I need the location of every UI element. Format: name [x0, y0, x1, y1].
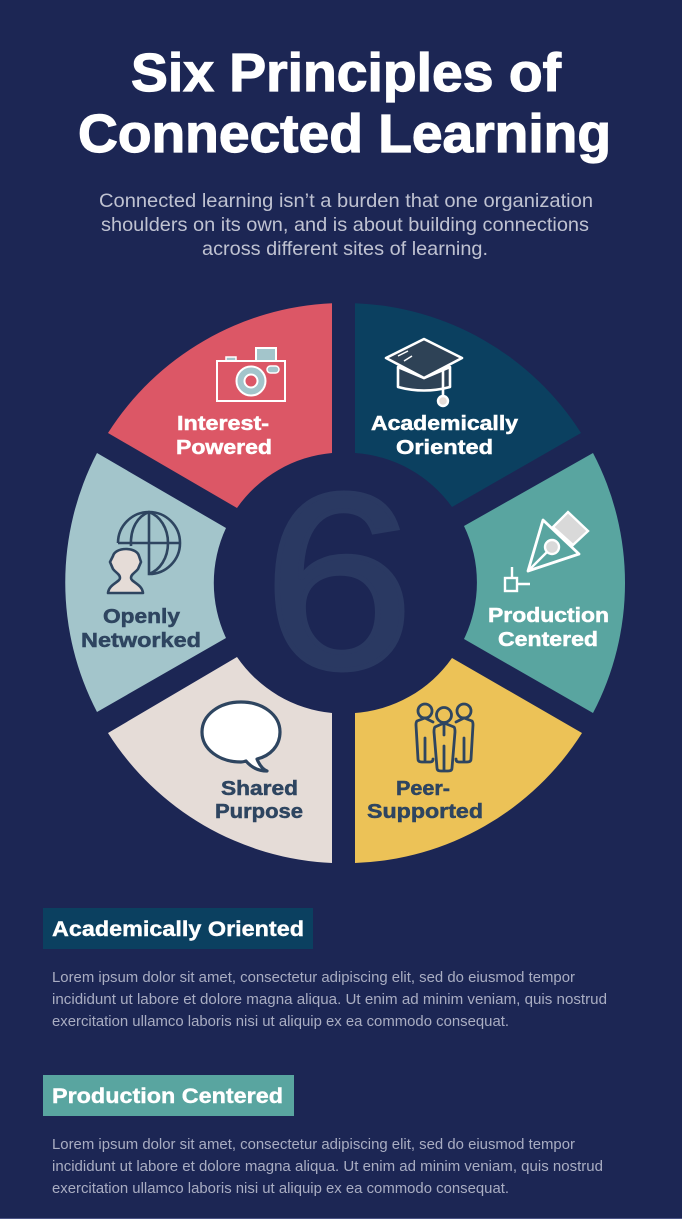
title: [78, 43, 611, 164]
icon: pen tool: [505, 512, 588, 591]
label: Peer-Supported: Peer-: [396, 778, 450, 800]
label: Peer-Supported: [367, 778, 483, 823]
big numeral 6 in the centre: 6: [264, 442, 414, 721]
text block: Lorem ipsum dolor sit amet, consectetur adipiscing elit, sed do eiusmod tempor: [52, 970, 575, 986]
text block: incididunt ut labore et dolore magna aliqua. Ut enim ad minim veniam, quis nostrud: [52, 992, 607, 1008]
panel: Academically Oriented description: [43, 908, 607, 1030]
title: Connected Learning: [78, 104, 611, 164]
label: Academically Oriented: Academically: [371, 413, 519, 435]
heading: Production Centered: [43, 1075, 294, 1116]
label: Production Centered: Production: [488, 605, 609, 627]
wedge: Shared Purpose: [108, 657, 332, 863]
label: Interest-Powered: Powered: [176, 437, 272, 459]
subtitle text: Connected learning isn’t a burden that one organization: [99, 190, 593, 212]
text block: [52, 1137, 603, 1197]
text block: [52, 970, 607, 1030]
heading: Production Centered: Production Centered: [52, 1085, 283, 1108]
text block: exercitation ullamco laboris nisi ut aliquip ex ea commodo consequat.: [52, 1181, 509, 1197]
label: Shared Purpose: Shared: [221, 778, 298, 800]
wedge: Academically Oriented: [355, 303, 581, 507]
title: Six Principles of: [131, 43, 562, 103]
text block: Lorem ipsum dolor sit amet, consectetur adipiscing elit, sed do eiusmod tempor: [52, 1137, 575, 1153]
label: Interest-Powered: [176, 413, 272, 459]
text block: exercitation ullamco laboris nisi ut aliquip ex ea commodo consequat.: [52, 1014, 509, 1030]
label: Peer-Supported: Supported: [367, 801, 483, 823]
text block: incididunt ut labore et dolore magna aliqua. Ut enim ad minim veniam, quis nostrud: [52, 1159, 603, 1175]
label: Shared Purpose: Purpose: [215, 801, 303, 823]
heading: Academically Oriented: [43, 908, 313, 949]
subtitle text: across different sites of learning.: [202, 238, 488, 260]
label: Academically Oriented: Oriented: [396, 437, 493, 459]
wedge: Production Centered: [464, 453, 625, 713]
subtitle text: shoulders on its own, and is about building connections: [101, 214, 589, 236]
icon: camera: [217, 348, 285, 401]
label: Interest-Powered: Interest-: [177, 413, 269, 435]
heading: Academically Oriented: Academically Oriented: [52, 918, 304, 941]
icon: globe with person: [108, 512, 180, 593]
label: Openly Networked: Networked: [81, 630, 201, 652]
icon: graduation cap: [386, 339, 462, 406]
label: Openly Networked: [81, 606, 201, 652]
wedge: Openly Networked: [65, 453, 226, 712]
label: Shared Purpose: [215, 778, 303, 823]
icon: three people: [416, 704, 473, 771]
label: Academically Oriented: [371, 413, 519, 459]
subtitle text: [99, 190, 593, 260]
wedge: Peer-Supported: [355, 658, 582, 863]
icon: speech bubble: [202, 702, 280, 771]
label: Openly Networked: Openly: [103, 606, 181, 628]
panel: Production Centered description: [43, 1075, 603, 1197]
label: Production Centered: Centered: [498, 629, 598, 651]
wedge: Interest-Powered: [108, 303, 332, 508]
label: Production Centered: [488, 605, 609, 651]
